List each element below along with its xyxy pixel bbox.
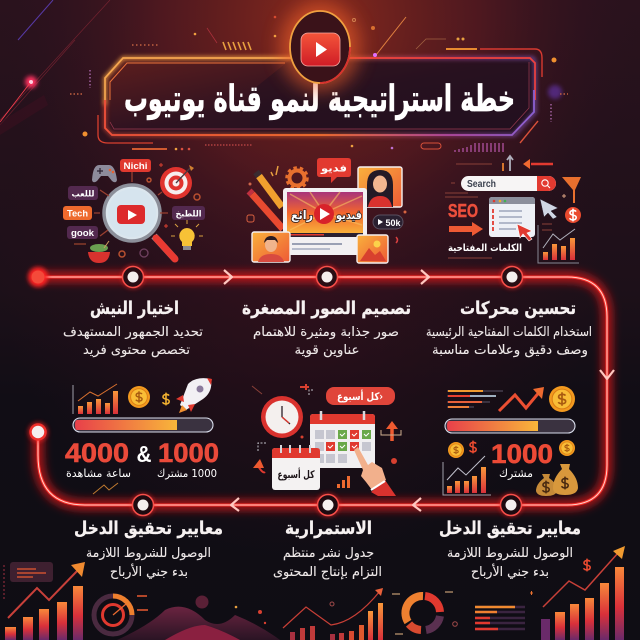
node 6 — [131, 493, 155, 517]
label: keywords: الكلمات المفتاحية — [448, 243, 522, 254]
label: gook: gook — [71, 228, 95, 239]
text: step 1 — [63, 299, 203, 358]
text: step 4 — [439, 519, 581, 580]
seo decoration — [445, 164, 566, 258]
icon: money bags — [536, 464, 578, 496]
node 5 — [316, 493, 340, 517]
label: SEO: SEO — [448, 201, 478, 221]
photo: landscape — [357, 235, 388, 263]
bar chart: growth — [73, 384, 118, 414]
label: 1000 subscribers: 1000 مشترك — [157, 467, 217, 480]
icon: dollar — [163, 393, 169, 405]
text: step 4: الوصول للشروط اللازمة — [447, 546, 573, 561]
arrow: step 4 to 5 — [413, 498, 421, 511]
illustration: niche research — [63, 159, 205, 263]
icon: youtube badge — [280, 3, 360, 91]
photo: man — [252, 232, 290, 262]
text: step 3 — [426, 299, 592, 358]
illustration: schedule — [252, 384, 401, 496]
icon: food bowl — [88, 241, 110, 263]
node 3 — [500, 265, 524, 289]
arrow head — [533, 387, 544, 399]
label: Nichi: Nichi — [124, 161, 148, 172]
text: step 5: التزام بإنتاج المحتوى — [273, 565, 382, 580]
schedule decoration — [252, 384, 397, 464]
photo: woman — [358, 167, 402, 207]
arrow: zigzag — [499, 390, 541, 411]
icon: gear — [286, 168, 308, 188]
label: watch hours: ساعة مشاهدة — [66, 467, 131, 480]
arrow: step 1 to 2 — [224, 270, 232, 284]
small bar chart — [283, 588, 383, 640]
arrow: step 5 to 6 — [231, 498, 239, 511]
text: step 6: الوصول للشروط اللازمة — [86, 546, 211, 561]
progress bar: 1000 — [445, 419, 575, 433]
node 4 — [499, 493, 523, 517]
chat bubble: video — [317, 158, 351, 183]
donut chart — [392, 592, 457, 634]
icon: target — [160, 165, 194, 199]
niche decoration — [74, 163, 200, 257]
pill: every week — [326, 387, 395, 405]
node 2 — [315, 265, 339, 289]
timeline start dot — [28, 267, 48, 287]
icon: small calendar — [272, 445, 320, 490]
icon: dollar red — [470, 441, 476, 453]
monitor: فيديو — [335, 208, 362, 223]
text: step 2: تصميم الصور المصغرة — [242, 299, 411, 319]
node 1 — [121, 265, 145, 289]
text: step 5 — [273, 519, 382, 580]
arrow: down — [600, 370, 614, 379]
bottom right chart — [541, 546, 625, 640]
mountains — [117, 596, 280, 640]
icon: gamepad — [92, 165, 117, 182]
mini bars — [447, 391, 503, 407]
icon: cursors — [517, 199, 558, 241]
monitor: رائع — [291, 208, 313, 222]
bar chart — [538, 225, 579, 263]
goal decoration — [93, 483, 118, 494]
header banner — [70, 3, 568, 152]
horizontal bar list — [475, 591, 533, 629]
gauge donut — [94, 596, 148, 634]
icon: small coin right — [559, 440, 575, 456]
text: step 1: تخصص محتوى فريد — [83, 343, 190, 358]
icon: pencils — [249, 172, 283, 229]
badge: 50k — [373, 215, 403, 229]
label: gook — [67, 226, 98, 239]
label: cooking — [172, 206, 205, 220]
text: step 1: تحديد الجمهور المستهدف — [63, 325, 203, 340]
text: step 6: معايير تحقيق الدخل — [74, 519, 223, 539]
icon: funnel — [562, 177, 581, 203]
arrow: step 2 to 3 — [421, 270, 429, 284]
icon: small calendar: كل أسبوع — [278, 467, 315, 481]
text: step 3: وصف دقيق وعلامات مناسبة — [432, 343, 588, 358]
label: Tech — [63, 206, 92, 220]
legend card — [4, 562, 53, 600]
illustration: thumbnail design — [247, 158, 406, 263]
mini chart — [337, 476, 350, 488]
ampersand: & — [136, 441, 152, 467]
text: step 1: اختيار النيش — [90, 299, 179, 319]
text: step 5: الاستمرارية — [285, 519, 372, 539]
icon: calendar — [310, 411, 375, 468]
text: step 3: تحسين محركات — [460, 299, 576, 319]
arrows: up and left — [503, 156, 553, 171]
text: step 3: استخدام الكلمات المفتاحية الرئيسية — [426, 325, 592, 340]
footer charts — [4, 546, 625, 640]
number: 1000: 1000 — [158, 438, 219, 468]
text: step 2: صور جذابة ومثيرة للاهتمام — [253, 325, 399, 340]
icon: rocket — [176, 378, 212, 413]
timeline path — [28, 265, 614, 517]
browser window — [489, 197, 535, 237]
text: step 4: معايير تحقيق الدخل — [439, 519, 581, 539]
pill: every week: ‹كل أسبوع — [337, 389, 383, 403]
header decoration — [70, 16, 568, 152]
icon: upload — [381, 421, 401, 441]
label: Nichi — [120, 159, 151, 172]
icon: return arrow — [253, 390, 313, 472]
text: step 2: عناوين قوية — [294, 343, 360, 358]
chat bubble: video: فديو — [320, 164, 347, 174]
label: cooking: اللطبخ — [176, 210, 202, 220]
icon: dollar coin — [565, 207, 581, 223]
icon: hand — [354, 447, 396, 496]
timeline end node — [28, 422, 48, 442]
label: play: لللعب — [72, 190, 94, 200]
icon: light bulb — [171, 220, 203, 250]
badge: 50k: 50k — [386, 218, 401, 229]
illustration: monetization 1000 — [443, 386, 578, 496]
number: 4000: 4000 — [65, 438, 129, 468]
search bar: Search — [467, 179, 496, 190]
text: step 6: بدء جني الأرباح — [110, 563, 188, 580]
illustration: seo — [445, 156, 581, 263]
panel: title frame — [98, 49, 542, 149]
icon: big coin — [549, 386, 575, 412]
text: step 6 — [74, 519, 223, 580]
bar chart: revenue — [443, 456, 491, 495]
bottom left chart — [5, 562, 85, 640]
text: step 2 — [242, 299, 411, 358]
number: 1000: 1000 — [491, 439, 553, 469]
monitor — [283, 188, 367, 255]
label: Tech: Tech — [67, 208, 88, 220]
arrow: seo right — [449, 222, 483, 236]
text: step 4: بدء جني الأرباح — [471, 563, 549, 580]
icon: clock — [261, 396, 303, 438]
thumbnail decoration — [247, 166, 406, 243]
icon: small coin left — [448, 442, 464, 458]
progress bar: 4000 — [73, 418, 213, 432]
icon: magnifier — [94, 168, 175, 259]
icon: coin — [128, 386, 150, 408]
label: subscribers: مشترك — [499, 466, 533, 481]
label: play — [68, 186, 98, 200]
illustration: goal 4000 — [65, 378, 219, 494]
text: step 5: جدول نشر منتظم — [283, 546, 374, 561]
